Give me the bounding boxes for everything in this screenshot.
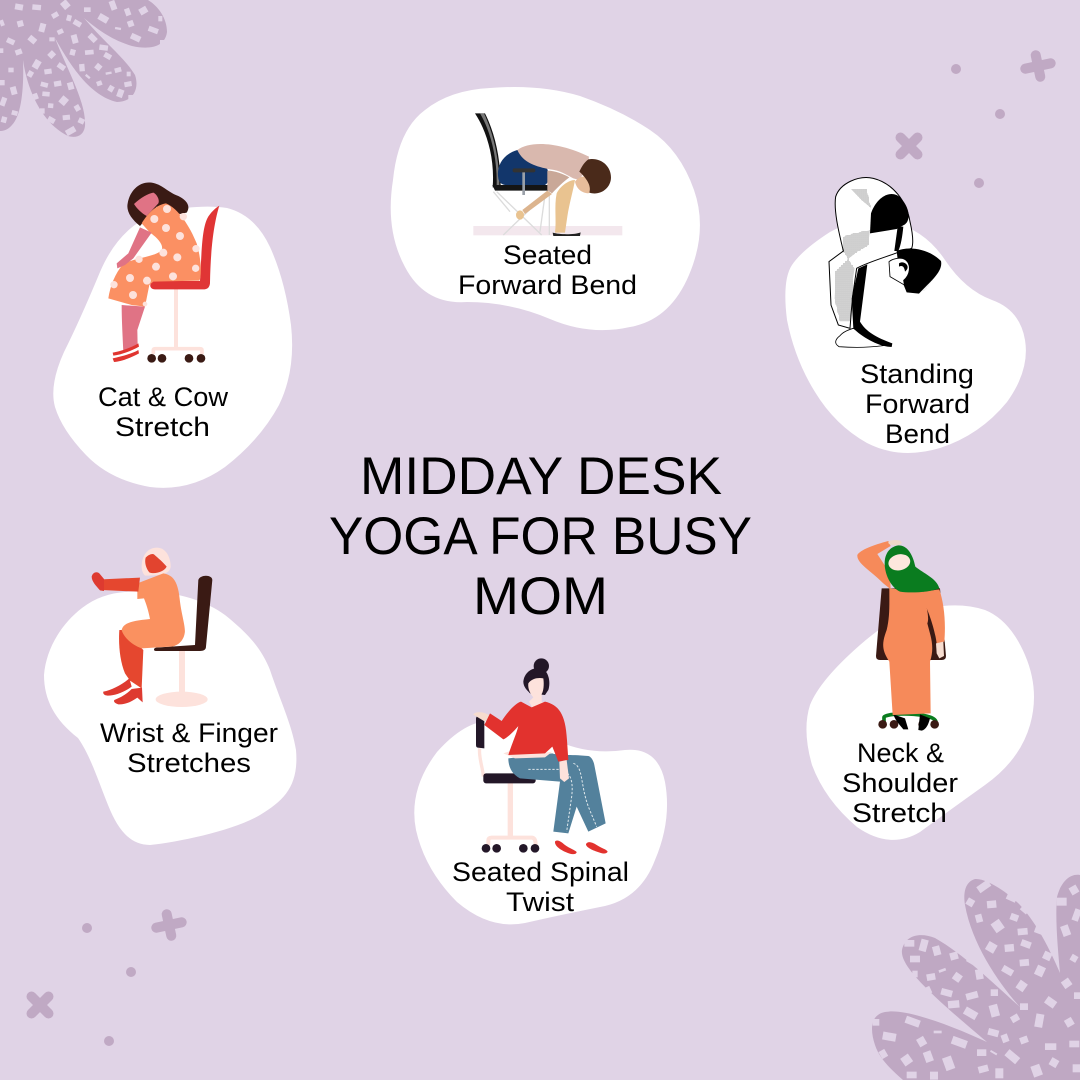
panel: wrist and finger stretches — [44, 548, 296, 845]
label: Standing — [860, 359, 974, 389]
label: Stretches — [127, 748, 251, 778]
label — [458, 240, 637, 300]
label — [98, 382, 228, 442]
label: Shoulder — [842, 768, 958, 798]
label: Neck & — [857, 738, 944, 768]
illustration: standing forward bend — [829, 178, 941, 347]
illustration: seated spinal twist — [473, 658, 608, 854]
flower: top-left corner — [0, 0, 167, 137]
label: Forward — [865, 389, 970, 419]
title: MIDDAY DESK — [360, 447, 722, 506]
panel: standing forward bend — [785, 178, 1026, 453]
label — [452, 857, 629, 917]
label: Stretch — [115, 412, 210, 442]
blob — [53, 207, 292, 488]
label: Stretch — [852, 798, 947, 828]
title — [329, 447, 752, 626]
label — [860, 359, 974, 449]
illustration: wrist and finger — [92, 548, 212, 707]
panel: neck and shoulder stretch — [806, 540, 1034, 840]
blob — [785, 220, 1026, 453]
label: Seated Spinal — [452, 857, 629, 887]
flower: bottom-right corner — [872, 875, 1080, 1080]
label — [100, 718, 278, 778]
blob — [414, 721, 667, 924]
label — [842, 738, 958, 828]
title: YOGA FOR BUSY — [329, 507, 752, 566]
decoration: sparkles bottom left — [24, 908, 188, 1046]
label: Bend — [885, 419, 950, 449]
blob — [806, 605, 1034, 840]
label: Wrist & Finger — [100, 718, 278, 748]
illustration: seated forward bend — [473, 113, 622, 236]
label: Twist — [506, 887, 575, 917]
panel: seated forward bend — [391, 87, 700, 330]
illustration: cat and cow — [108, 182, 219, 363]
label: Cat & Cow — [98, 382, 228, 412]
label: Forward Bend — [458, 270, 637, 300]
blob — [44, 591, 296, 845]
blob — [391, 87, 700, 330]
title: MOM — [473, 567, 608, 626]
decoration: sparkles top right — [893, 49, 1057, 188]
illustration: neck and shoulder — [857, 540, 946, 731]
label: Seated — [503, 240, 592, 270]
panel: seated spinal twist — [414, 658, 667, 924]
panel: cat and cow stretch — [53, 182, 292, 488]
